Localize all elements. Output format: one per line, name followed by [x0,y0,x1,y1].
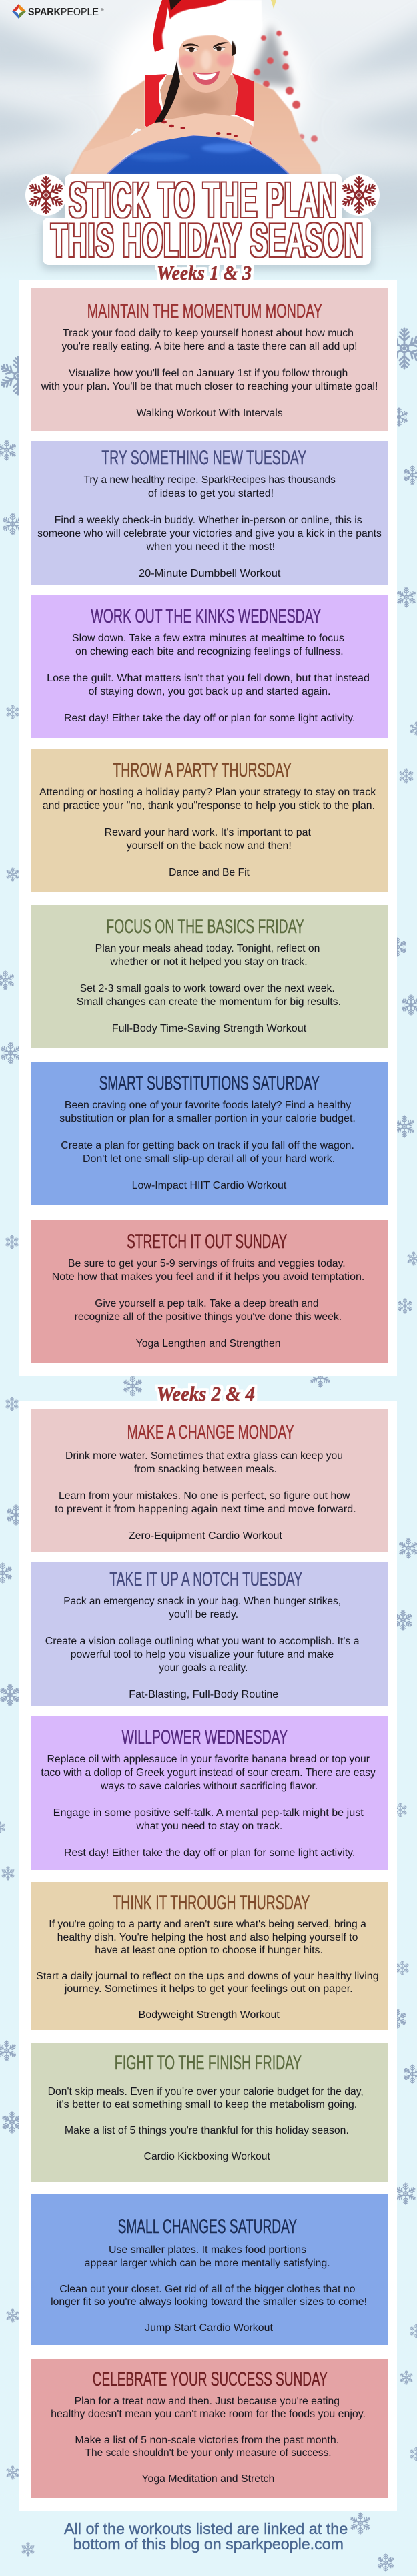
tips text: Replace oil with applesauce in your favorite banana bread or top your [47,1754,370,1765]
tips text: Yoga Lengthen and Strengthen [136,1338,280,1349]
exercise ball [107,135,290,174]
tips text: Reward your hard work. It's important to pat [105,827,312,838]
tips text: you'll be ready. [169,1609,238,1620]
tips text: Jump Start Cardio Workout [145,2322,274,2334]
card: Make a Change Monday [31,1409,388,1552]
tips text [77,943,341,1034]
tips text: on chewing each bite and recognizing feelings of fullness. [75,646,344,657]
tips text [39,787,376,878]
tips text: Try a new healthy recipe. SparkRecipes has thousands [84,474,336,486]
tips text: Give yourself a pep talk. Take a deep breath and [95,1298,319,1309]
tips text: Rest day! Either take the day off or plan for some light activity. [64,713,355,724]
panel: weeks 2 and 4 [19,1401,397,2511]
heading: WILLPOWER WEDNESDAY [121,1726,288,1748]
tips text: Don't skip meals. Even if you're over your calorie budget for the day, [48,2086,364,2098]
tips text: Walking Workout With Intervals [136,408,283,419]
card: Smart Substitutions Saturday [31,1062,388,1205]
tips text: Pack an emergency snack in your bag. When hunger strikes, [63,1596,341,1607]
tips text [52,1258,364,1349]
tips text: substitution or plan for a smaller portion in your calorie budget. [59,1113,356,1124]
tips text: Start a daily journal to reflect on the ups and downs of your healthy living [36,1971,379,1982]
face [179,35,234,93]
tips text: Lose the guilt. What matters isn't that you fell down, but that instead [47,673,370,684]
heading: MAKE A CHANGE MONDAY [127,1421,294,1443]
tips text [47,633,370,724]
heading: Weeks 2 & 4: Weeks 2 & 4 [157,1382,255,1405]
tips text: Yoga Meditation and Stretch [141,2473,274,2485]
tips text: from snacking between meals. [134,1464,277,1475]
tips text: Cardio Kickboxing Workout [144,2151,271,2162]
card: Small Changes Saturday [31,2194,388,2345]
icon: red snowflake right [338,174,380,216]
tips text: Clean out your closet. Get rid of all of the bigger clothes that no [59,2284,356,2295]
tips text: The scale shouldn't be your only measure of success. [85,2447,332,2459]
card: Celebrate Your Success Sunday [31,2359,388,2498]
header background with soft rays [0,0,417,280]
tips text [48,2086,364,2162]
tips text: Rest day! Either take the day off or plan for some light activity. [64,1847,355,1859]
neck and chest [160,75,238,123]
tips text: ways to save calories without sacrificing flavor. [100,1781,318,1792]
tips text: you're really eating. A bite here and a taste there can all add up! [61,341,358,352]
tips text: If you're going to a party and aren't sure what's being served, bring a [49,1919,366,1930]
tips text: Create a vision collage outlining what you want to accomplish. It's a [45,1636,360,1647]
tips text: Learn from your mistakes. No one is perfect, so figure out how [59,1490,350,1502]
tips text: whether or not it helped you stay on track. [109,956,308,968]
tips text: Be sure to get your 5-9 servings of fruits and veggies today. [68,1258,346,1269]
card: Fight to the Finish Friday [31,2043,388,2182]
tips text: it's better to eat something small to keep the metabolism going. [56,2099,357,2110]
card: Stretch It Out Sunday [31,1220,388,1363]
tips text: Visualize how you'll feel on January 1st if you follow through [69,368,348,379]
card: Work Out the Kinks Wednesday [31,595,388,738]
tips text: recognize all of the positive things you've done this week. [75,1311,342,1323]
card: Try Something New Tuesday [31,441,388,585]
tips text: Use smaller plates. It makes food portions [109,2244,306,2256]
tips text [59,1100,356,1191]
title [51,174,364,266]
tips text: healthy dish. You're helping the host and also helping yourself to [57,1932,358,1943]
forearms and hands [73,113,254,175]
tips text [37,474,382,579]
card: Willpower Wednesday [31,1716,388,1870]
tips text: Fat-Blasting, Full-Body Routine [129,1689,278,1700]
tips text: Attending or hosting a holiday party? Plan your strategy to stay on track [39,787,376,798]
tips text: Plan for a treat now and then. Just because you're eating [75,2396,340,2407]
tips text: of ideas to get you started! [148,488,274,499]
braid [155,61,180,123]
background Christmas tree [248,0,318,142]
footer note: bottom of this blog on sparkpeople.com [73,2535,344,2553]
footer note: All of the workouts listed are linked at the [64,2520,348,2537]
tips text: Track your food daily to keep yourself honest about how much [63,328,354,339]
tips text: have at least one option to choose if hunger hits. [95,1945,323,1956]
heading: THINK IT THROUGH THURSDAY [113,1892,310,1914]
card: Throw a Party Thursday [31,749,388,892]
tips text [55,1450,356,1542]
tips text: longer fit so you're always looking toward the smaller sizes to come! [51,2296,367,2308]
icon: SparkPeople logo: SPARKPEOPLE [28,7,99,18]
arms and shoulders [69,80,322,177]
heading: FIGHT TO THE FINISH FRIDAY [115,2052,302,2074]
heading: FOCUS ON THE BASICS FRIDAY [106,916,304,938]
gap under left arm [130,128,142,136]
tips text: taco with a dollop of Greek yogurt instead of sour cream. There are easy [41,1767,376,1779]
tips text: what you need to stay on track. [135,1821,282,1832]
tips text: 20-Minute Dumbbell Workout [139,568,281,579]
tips text: Bodyweight Strength Workout [139,2009,280,2021]
heading: Weeks 1 & 3: Weeks 1 & 3 [157,261,252,284]
tips text: your goals a reality. [159,1662,248,1674]
title sticker [25,174,380,270]
tips text: Plan your meals ahead today. Tonight, reflect on [95,943,320,954]
tips text: Drink more water. Sometimes that extra glass can keep you [65,1450,343,1462]
tips text [51,2396,366,2485]
card: Think It Through Thursday [31,1882,388,2030]
tips text: to prevent it from happening again next time and move forward. [55,1504,356,1515]
tips text [41,328,378,419]
tips text: Full-Body Time-Saving Strength Workout [112,1023,307,1034]
tips text: of staying down, you got back up and started again. [89,686,330,697]
heading: SMALL CHANGES SATURDAY [118,2216,297,2238]
tips text: when you need it the most! [146,541,275,553]
footer note [64,2520,348,2553]
tips text: someone who will celebrate your victories and give you a kick in the pants [37,528,382,539]
tips text: Zero-Equipment Cardio Workout [129,1530,283,1542]
card: Maintain the Momentum Monday [31,288,388,431]
heading: TRY SOMETHING NEW TUESDAY [101,447,306,469]
icon: SparkPeople logo: ® [101,8,104,13]
card: Take It Up a Notch Tuesday [31,1562,388,1706]
tips text [51,2244,367,2334]
tips text: Make a list of 5 things you're thankful for this holiday season. [65,2125,349,2136]
tips text: healthy doesn't mean you can't make room for the foods you enjoy. [51,2408,366,2420]
tips text: Don't let one small slip-up derail all of your hard work. [83,1153,335,1165]
tips text: yourself on the back now and then! [127,840,292,852]
heading: THROW A PARTY THURSDAY [113,759,292,781]
icon: red snowflake left [25,174,67,216]
tips text: Make a list of 5 non-scale victories from the past month. [75,2435,339,2446]
icon: SparkPeople logo [12,4,104,19]
painted nails [161,121,238,137]
tips text [41,1754,376,1859]
tips text: Been craving one of your favorite foods lately? Find a healthy [65,1100,351,1111]
tips text: Engage in some positive self-talk. A mental pep-talk might be just [53,1807,364,1819]
tips text: journey. Sometimes it helps to get your feelings out on paper. [64,1983,353,1995]
hat [153,0,227,52]
panel: weeks 1 and 3 [19,280,397,1376]
side hair [232,40,236,56]
heading: STRETCH IT OUT SUNDAY [127,1231,287,1253]
tips text: with your plan. You'll be that much closer to reaching your ultimate goal! [41,381,378,392]
tips text: Low-Impact HIIT Cardio Workout [132,1180,287,1191]
tips text: Dance and Be Fit [169,867,250,878]
brows and eyes [183,42,229,52]
tips text: Small changes can create the momentum for big results. [77,996,341,1008]
tips text: Find a weekly check-in buddy. Whether in-person or online, this is [55,515,362,526]
tips text [36,1919,379,2021]
red tank top [145,73,254,145]
tips text: Slow down. Take a few extra minutes at mealtime to focus [72,633,344,644]
tips text: Set 2-3 small goals to work toward over the next week. [80,983,335,994]
photo: woman in Santa hat leaning on an exercise ball [69,0,322,174]
tips text: powerful tool to help you visualize your future and make [71,1649,334,1660]
tips text [45,1596,360,1700]
tips text: appear larger which can be more mentally satisfying. [85,2258,330,2269]
tips text: Note how that makes you feel and if it helps you avoid temptation. [52,1271,364,1283]
heading: TAKE IT UP A NOTCH TUESDAY [109,1568,302,1590]
smile [193,71,220,85]
tips text: Create a plan for getting back on track if you fall off the wagon. [61,1140,354,1151]
card: Focus on the Basics Friday [31,905,388,1048]
tips text: and practice your "no, thank you"response to help you stick to the plan. [43,800,375,812]
